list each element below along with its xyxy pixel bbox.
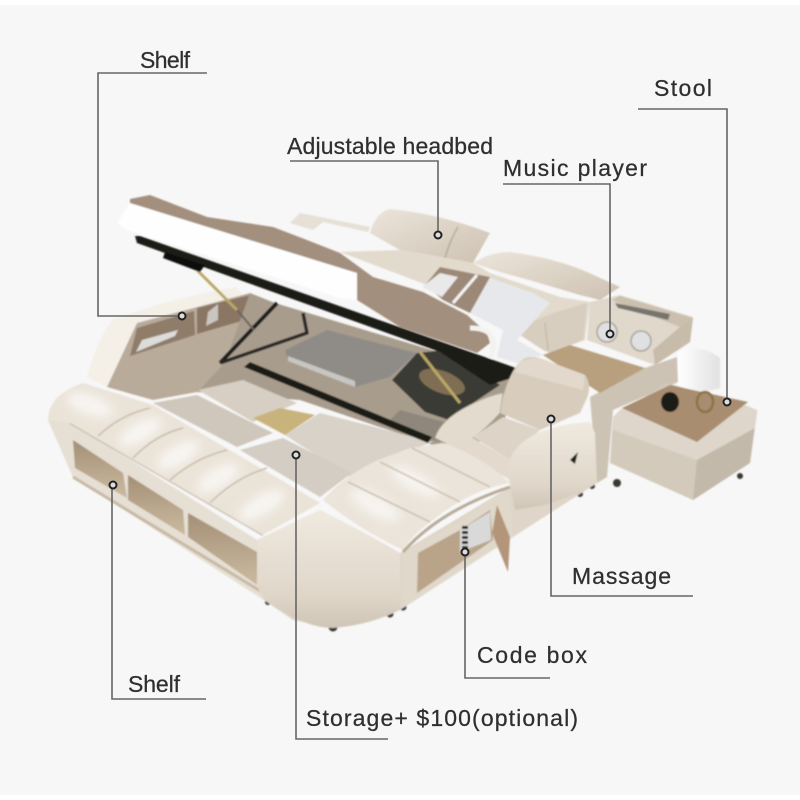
bed illustration [48, 195, 757, 632]
lower black lift bar [244, 362, 432, 443]
leader and label: Code box: Code box [477, 642, 588, 668]
fold of striped sheet [470, 328, 493, 358]
leader and label: Massage [548, 416, 693, 596]
leader and label: Music player [503, 155, 647, 338]
wooden armrest table [543, 345, 645, 393]
leader and label: Code box [462, 548, 588, 678]
lamp base ring [697, 392, 713, 412]
leader and label: Shelf bottom: Shelf [128, 671, 181, 697]
frame hardware [163, 252, 205, 272]
stool wooden tray [622, 385, 748, 442]
shelf band front [48, 420, 267, 602]
shelf niche two [128, 475, 185, 535]
headboard rail [290, 213, 370, 232]
bed platform base [48, 420, 597, 628]
leader and label: Storage: Storage+ $100(optional) [306, 705, 578, 731]
open storage compartment [197, 293, 515, 445]
code box section [402, 487, 513, 607]
backrest cushion [340, 250, 590, 353]
leader and label: Shelf bottom [110, 482, 206, 699]
shelf niche three [188, 513, 257, 585]
leader and label: Storage [292, 452, 578, 739]
leader and label: Shelf top [98, 47, 207, 320]
leader and label: Stool [638, 75, 730, 406]
leader and label: Adjustable headbed [287, 133, 493, 238]
small black pot [661, 392, 679, 412]
shelf niche one [73, 440, 127, 498]
leader and label: Music player: Music player [503, 155, 647, 181]
lift linkage [197, 270, 307, 363]
rounded front corner [257, 510, 400, 628]
table lamp shade [678, 349, 720, 391]
speaker two [631, 331, 651, 351]
leader and label: Adjustable headbed: Adjustable headbed [287, 133, 493, 159]
leader and label: Stool: Stool [654, 75, 712, 101]
front gas strut [420, 352, 460, 403]
brown mattress cover [130, 195, 490, 353]
long upholstered cushions [48, 383, 320, 535]
speaker one [597, 322, 617, 342]
recliner chair [435, 357, 597, 510]
adjustable headrest [370, 209, 490, 263]
console side table base [590, 357, 678, 483]
lifted frame [135, 236, 516, 385]
storage floor pads [153, 380, 433, 497]
bed feet [77, 473, 743, 632]
mattress [117, 203, 360, 300]
bedding [422, 267, 550, 363]
footrest cushions [323, 443, 510, 550]
stool [610, 349, 757, 500]
left storage wing [87, 287, 270, 400]
second headrest [473, 252, 620, 300]
leader and label: Massage: Massage [572, 563, 671, 589]
music console [587, 295, 693, 365]
leader and label: Shelf top: Shelf [140, 47, 191, 73]
